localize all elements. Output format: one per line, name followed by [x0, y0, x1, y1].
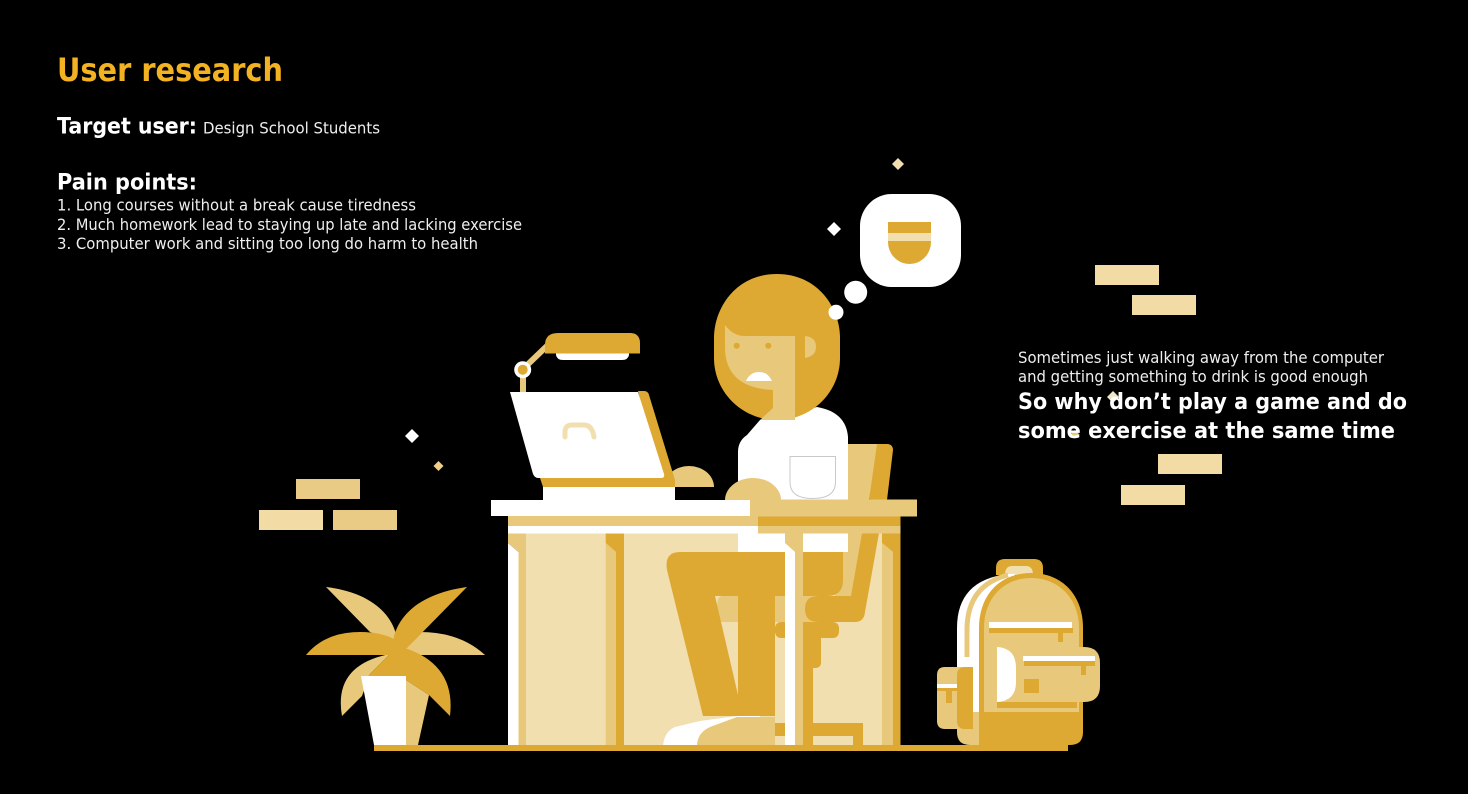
thought bubble: [844, 194, 961, 304]
callout text: and getting something to drink is good enough: [1018, 367, 1368, 386]
callout text: So why don’t play a game and do: [1018, 390, 1407, 415]
target user line: Target user:: [57, 114, 197, 140]
desk top: [491, 500, 917, 534]
pain points: [57, 170, 522, 253]
pain points: 2. Much homework lead to staying up late and lacking exercise: [57, 215, 522, 234]
target user line: [57, 114, 380, 140]
sparkles: [405, 158, 1119, 471]
callout text: [1018, 348, 1407, 444]
potted plant: [306, 587, 485, 745]
chair and seated legs: [663, 533, 879, 746]
bricks left: [259, 479, 397, 530]
bricks right: [1095, 265, 1222, 505]
backpack: [937, 559, 1100, 745]
pain points: 3. Computer work and sitting too long do harm to health: [57, 234, 478, 253]
head: [714, 274, 844, 420]
callout text: some exercise at the same time: [1018, 419, 1395, 444]
target user line: Design School Students: [203, 118, 380, 138]
title: User research: [57, 51, 283, 89]
hands: [664, 466, 781, 500]
desk front legs: [508, 533, 900, 746]
floor line: [374, 745, 1068, 751]
pain points: 1. Long courses without a break cause tiredness: [57, 196, 416, 214]
torso: [738, 407, 848, 500]
chair back: [848, 444, 893, 500]
pain points: Pain points:: [57, 170, 197, 196]
laptop: [510, 391, 675, 500]
desk back panel: [526, 533, 896, 746]
callout text: Sometimes just walking away from the computer: [1018, 348, 1384, 367]
desk lamp: [514, 333, 640, 393]
